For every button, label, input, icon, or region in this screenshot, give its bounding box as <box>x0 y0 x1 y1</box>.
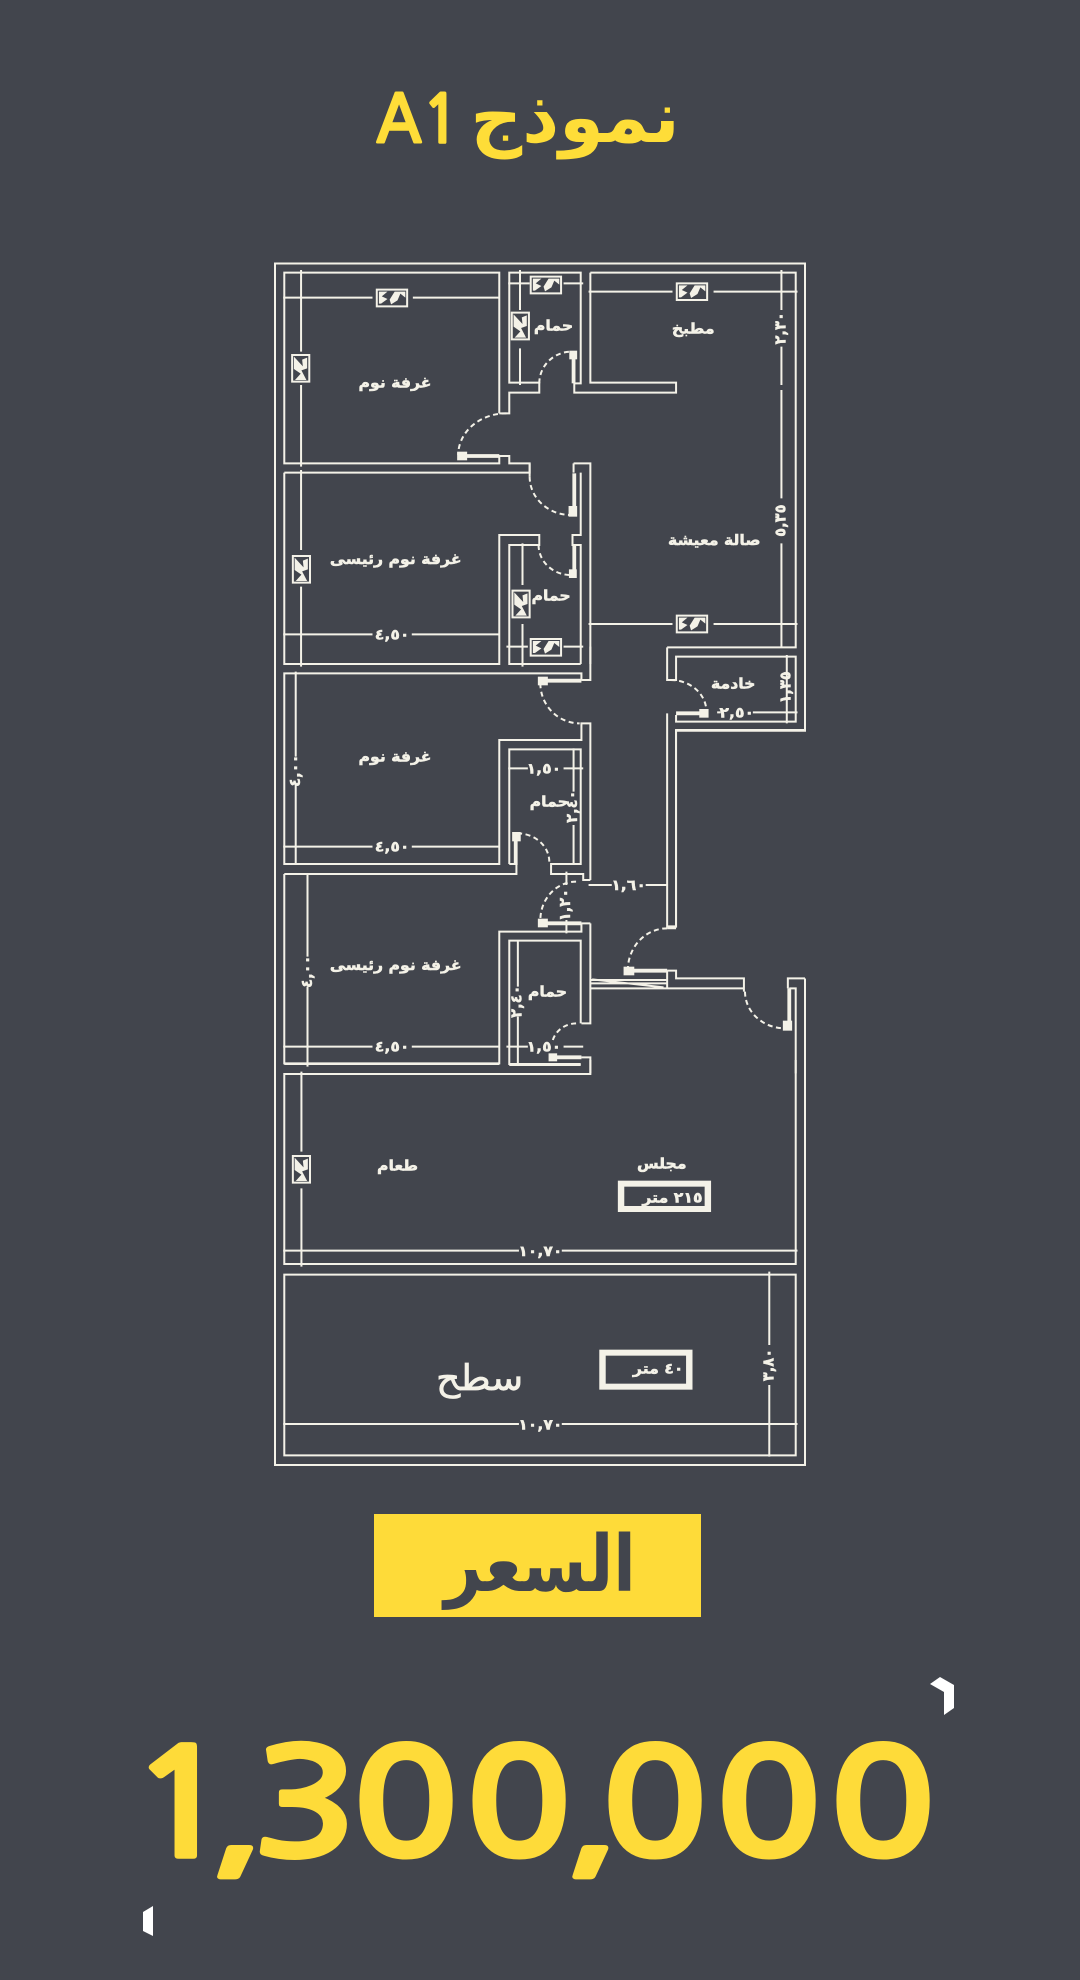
area badge: 215 m: ٢١٥ متر <box>641 1189 703 1207</box>
room: master bedroom 2: ٤,٠٠ <box>297 955 316 988</box>
title: نموذج <box>470 75 680 160</box>
floor plan <box>275 264 805 1465</box>
title <box>376 75 680 160</box>
room: living hall: صالة معيشة <box>668 531 761 549</box>
room: master bedroom 2 <box>283 872 590 1067</box>
corridor dimension <box>589 876 667 894</box>
entrance door and windows <box>590 927 805 1073</box>
title: A1 <box>376 86 460 153</box>
room: bedroom 1: غرفة نوم <box>358 374 432 391</box>
room: bathroom 2 <box>506 543 583 667</box>
room: maid room: ١,٣٥ <box>776 671 794 704</box>
decorative white mark: bottom left <box>143 1906 153 1936</box>
room: bedroom 3: ٤,٠٠ <box>286 754 304 787</box>
room: roof: سطح <box>436 1357 523 1399</box>
room: dining and majlis: طعام <box>377 1157 418 1175</box>
room: master bedroom 2: ٤,٥٠ <box>375 1038 410 1056</box>
room: bathroom 3: ١,٥٠ <box>527 760 561 777</box>
room: master bedroom 1 <box>283 463 590 667</box>
area badge: 40 m: ٤٠ متر <box>632 1360 683 1377</box>
room: kitchen: ٢,٣٠ <box>771 312 790 345</box>
room: dining and majlis <box>283 1060 797 1267</box>
plan lower section <box>283 1060 797 1457</box>
room: bathroom 4: ٢,٤٠ <box>507 985 526 1018</box>
room: bathroom 4: ١,٥٠ <box>527 1038 561 1056</box>
area badge: 215 m <box>621 1184 708 1209</box>
room: bedroom 3 <box>283 647 590 880</box>
room: bedroom 1 <box>283 270 530 473</box>
price label: السعر <box>442 1518 636 1610</box>
room: master bedroom 1: ٤,٥٠ <box>375 626 410 643</box>
room: living hall <box>589 390 797 647</box>
room: bathroom 2: حمام <box>531 587 571 605</box>
decorative white mark: top right <box>930 1677 954 1715</box>
room: bathroom 3 <box>284 748 590 880</box>
plan middle section <box>283 647 805 1073</box>
room: master bedroom 1: غرفة نوم رئيسى <box>330 550 462 568</box>
room: bathroom 4 <box>506 941 590 1073</box>
room: roof: ١٠,٧٠ <box>518 1416 563 1433</box>
room: bathroom 4: حمام <box>528 983 567 1001</box>
corridor dimension: ١,٦٠ <box>611 876 646 894</box>
room: maid room: ٢,٥٠ <box>719 704 754 721</box>
room: roof <box>283 1272 797 1457</box>
room: master bedroom 2: غرفة نوم رئيسى <box>330 956 462 974</box>
area badge: 40 m <box>602 1353 689 1387</box>
room: bathroom 3: حمام <box>530 793 569 811</box>
outer boundary <box>275 264 805 1465</box>
room: master bedroom 2: ١,٢٠ <box>556 889 574 921</box>
room: maid room <box>667 647 805 927</box>
room: kitchen <box>589 270 797 647</box>
room: maid room: خادمة <box>711 675 755 692</box>
room: kitchen: مطبخ <box>672 320 715 337</box>
room: bedroom 3: غرفة نوم <box>358 748 432 766</box>
price label <box>374 1514 701 1617</box>
room: dining and majlis: ١٠,٧٠ <box>518 1242 563 1260</box>
room: dining and majlis: مجلس <box>637 1155 687 1172</box>
plan upper section <box>283 270 797 667</box>
price figure: 1,300,000 <box>127 1731 937 1880</box>
room: living hall: ٥,٣٥ <box>771 504 790 537</box>
room: bedroom 3: ٤,٥٠ <box>375 838 410 856</box>
room: bathroom 1: حمام <box>534 317 573 335</box>
room: roof: ٣,٨٠ <box>759 1349 778 1381</box>
room: bathroom 1 <box>499 270 676 413</box>
room: bathroom 3: ٢,٤٠ <box>563 790 581 823</box>
